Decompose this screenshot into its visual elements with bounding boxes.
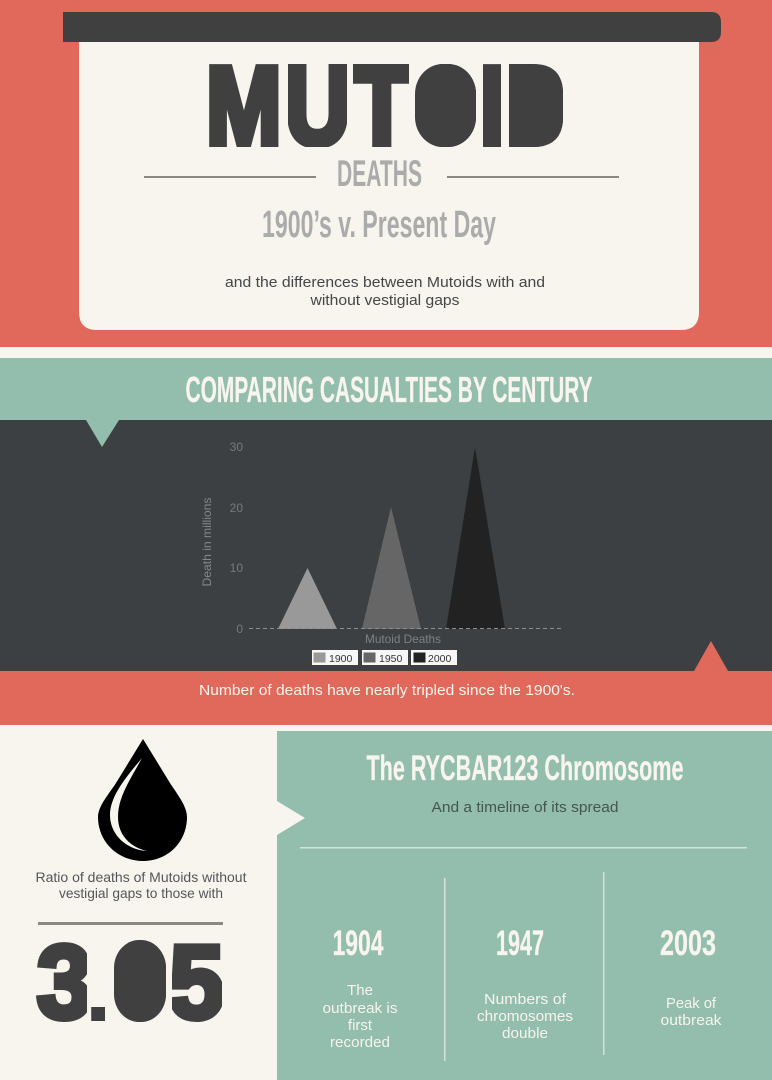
panel: chart caption [0,641,772,725]
y axis labels: 0 [236,622,243,636]
legend [312,650,457,665]
y axis labels: 30 [230,440,243,454]
baseline [249,628,562,630]
panel: chromosome timeline [277,731,772,1080]
intro text [225,274,545,309]
y axis labels: 20 [230,501,243,515]
y axis title: Death in millions [200,498,214,586]
event: 1904 [322,924,398,1051]
panel: chart caption: Number of deaths have nearly tripled since the 1900's. [199,682,575,699]
intro text: without vestigial gaps [309,292,460,309]
bar 1950 [362,507,421,629]
legend: 1950 [379,653,403,665]
event: 1947 [477,924,573,1042]
panel: casualties heading [0,358,772,420]
event: 2003 [660,924,722,1029]
panel: chart background [0,420,772,671]
event: 1947: chromosomes [477,1008,573,1025]
ratio description: Ratio of deaths of Mutoids without [36,869,247,885]
x axis title: Mutoid Deaths [365,632,441,646]
subtitle: date range: 1900’s v. Present Day [262,204,496,246]
ratio description: vestigial gaps to those with [59,885,223,901]
subheading: And a timeline of its spread [432,799,618,816]
subtitle: deaths: DEATHS [337,153,422,194]
event: 1947: double [502,1025,548,1042]
y axis labels: 10 [230,561,243,575]
event: 1904: The [347,982,373,999]
legend: 2000 [428,653,452,665]
ratio description [36,869,247,901]
event: 2003: 2003 [660,924,716,963]
legend: 1900 [329,653,353,665]
intro text: and the differences between Mutoids with and [225,274,545,291]
event: 1947: Numbers of [484,991,567,1008]
paper card [79,40,699,330]
bar chart [200,440,562,665]
timeline dividers [300,847,747,1061]
panel: header [0,0,772,347]
pointer: teal notch [86,420,119,447]
event: 1904: outbreak is [322,1000,398,1017]
event: 1904: recorded [330,1034,390,1051]
bar 2000 [446,447,505,629]
event: 2003: outbreak [660,1012,722,1029]
divider [38,922,223,925]
event: 2003: Peak of [666,995,717,1012]
event: 1904: 1904 [332,924,384,963]
title [209,64,563,147]
y axis labels [230,440,243,636]
event: 1947: 1947 [496,924,544,963]
ratio value: 3.05 [37,925,224,1041]
event: 1904: first [348,1017,373,1034]
title: MUTOID [206,46,571,168]
bar 1900 [278,568,337,629]
icon: water drop [98,739,187,861]
ratio value [36,940,222,1022]
dark top bar [63,12,721,42]
panel: ratio [36,739,247,1041]
